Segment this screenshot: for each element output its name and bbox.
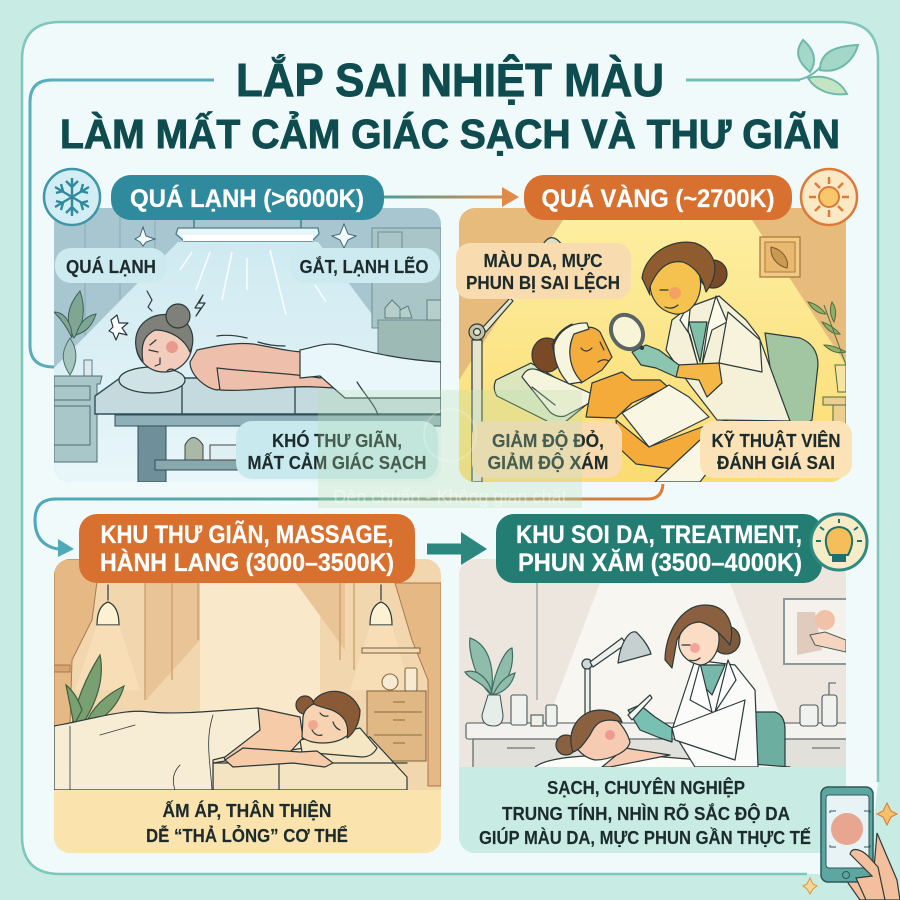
watermark: Đèn chuẩn - Không gian chất <box>333 487 567 507</box>
watermark <box>318 390 582 508</box>
curtain left <box>54 559 100 726</box>
pillow <box>494 363 592 427</box>
light cones <box>145 583 205 700</box>
desk <box>466 723 856 769</box>
label: QUÁ LẠNH <box>66 256 156 277</box>
desk lamp <box>582 632 651 725</box>
patient treatment <box>534 709 791 767</box>
header pill: HÀNH LANG (3000–3500K) <box>100 548 394 577</box>
panel: relaxation <box>54 514 441 853</box>
label: GẮT, LẠNH LẼO <box>300 256 428 277</box>
label: KHÓ THƯ GIÃN, <box>272 430 402 451</box>
caption band <box>54 790 441 853</box>
label: KỸ THUẬT VIÊN <box>712 430 840 451</box>
wall frame <box>760 237 800 277</box>
wall picture <box>784 599 854 664</box>
lamp <box>176 220 319 241</box>
label <box>236 421 438 479</box>
pillow <box>300 728 377 757</box>
icon: snowflake <box>44 169 100 225</box>
shelf right <box>372 228 441 368</box>
bottles <box>482 683 837 726</box>
sparkle <box>877 803 897 825</box>
plant right <box>808 302 846 435</box>
label <box>55 248 167 283</box>
wall shelf and decor <box>362 648 426 761</box>
caption: TRUNG TÍNH, NHÌN RÕ SẮC ĐỘ DA <box>502 803 790 824</box>
title <box>60 54 840 157</box>
label <box>290 248 440 283</box>
lamp stand <box>469 238 562 482</box>
label <box>472 421 622 478</box>
caption band <box>459 767 846 853</box>
header pill: KHU SOI DA, TREATMENT, <box>516 521 802 549</box>
label <box>456 243 631 299</box>
header pill: QUÁ VÀNG (~2700K) <box>542 184 774 213</box>
connector: title to leaves <box>686 78 800 82</box>
header pill: PHUN XĂM (3500–4000K) <box>518 548 802 577</box>
title: LÀM MẤT CẢM GIÁC SẠCH VÀ THƯ GIÃN <box>60 111 840 157</box>
header pill <box>79 514 415 583</box>
back wall <box>200 583 320 763</box>
icon: phone with hand <box>821 787 900 900</box>
label <box>700 421 852 478</box>
icon: leaves <box>797 40 858 94</box>
caption: GIÚP MÀU DA, MỰC PHUN GẦN THỰC TẾ <box>479 827 811 848</box>
label: GIẢM ĐỘ XÁM <box>488 452 608 473</box>
patient cold <box>119 304 441 415</box>
pendant lamps <box>75 585 410 690</box>
light cone <box>54 242 441 482</box>
panel: too cold <box>44 169 441 482</box>
connector: yellow to relaxation <box>35 484 663 557</box>
stress marks <box>109 291 285 346</box>
plant <box>465 638 515 695</box>
caption <box>146 800 348 846</box>
arrow: relaxation to treatment <box>427 532 487 565</box>
connector: title to cold panel <box>30 80 214 367</box>
chair <box>755 712 785 767</box>
wall planks <box>84 216 156 337</box>
caption: SẠCH, CHUYÊN NGHIỆP <box>547 777 745 798</box>
caption: DỄ “THẢ LỎNG” CƠ THỂ <box>146 825 348 846</box>
sparkles <box>135 224 356 248</box>
plant and cabinet <box>54 291 102 462</box>
icon: light bulb <box>811 514 867 570</box>
label: PHUN BỊ SAI LỆCH <box>466 272 620 293</box>
wall panels <box>145 583 354 700</box>
caption <box>479 777 811 848</box>
header pill <box>111 175 384 220</box>
header pill <box>496 514 822 583</box>
massage table <box>95 378 441 482</box>
header pill: QUÁ LẠNH (>6000K) <box>130 184 364 213</box>
header pill: KHU THƯ GIÃN, MASSAGE, <box>100 519 394 549</box>
label: GIẢM ĐỘ ĐỎ, <box>492 430 604 451</box>
header pill <box>524 175 792 220</box>
chair <box>765 333 818 430</box>
arrow: cold to yellow <box>384 187 519 207</box>
massage table <box>213 737 407 790</box>
label: MẤT CẢM GIÁC SẠCH <box>248 452 426 473</box>
panel: too yellow <box>456 169 857 482</box>
label: ĐÁNH GIÁ SAI <box>717 452 835 473</box>
icon: sun <box>801 169 857 225</box>
technician yellow <box>604 242 790 421</box>
patient yellow <box>532 323 745 482</box>
plant <box>66 655 124 725</box>
curtain right <box>395 583 441 786</box>
caption: ẤM ÁP, THÂN THIỆN <box>162 800 332 821</box>
sparkle <box>803 878 817 894</box>
panel: treatment <box>459 514 867 853</box>
person relaxed <box>54 691 360 790</box>
title: LẮP SAI NHIỆT MÀU <box>236 54 664 106</box>
technician treatment <box>628 605 758 767</box>
label: MÀU DA, MỰC <box>484 250 602 271</box>
light rays <box>180 250 326 315</box>
